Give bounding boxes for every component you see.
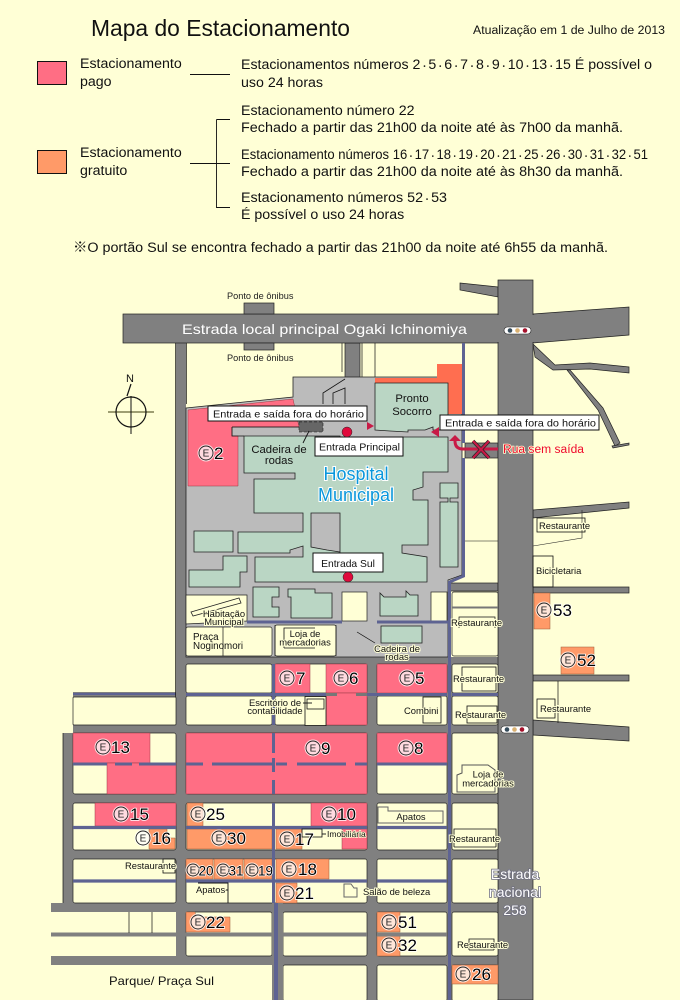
traffic light north bbox=[504, 327, 531, 334]
south building 3 bbox=[380, 591, 418, 616]
east wing bbox=[440, 483, 458, 567]
beauty salon bbox=[344, 884, 431, 897]
callout: main entrance: Entrada Principal bbox=[319, 442, 400, 454]
marker 7: E bbox=[284, 674, 291, 684]
building label: wheelchair bbox=[251, 431, 309, 467]
restaurant 7: Restaurante bbox=[125, 860, 176, 871]
marker 30: 30 bbox=[227, 829, 246, 848]
accounting office bbox=[247, 696, 326, 726]
restaurant 5: Restaurante bbox=[540, 703, 591, 714]
municipal housing: Habitação bbox=[203, 608, 245, 619]
callout: after-hours entrance east bbox=[440, 415, 599, 430]
callout: main entrance bbox=[315, 437, 403, 456]
marker 30: E bbox=[216, 834, 223, 844]
traffic light south bbox=[501, 726, 529, 733]
emergency lot strip bbox=[375, 364, 462, 414]
real estate office: Imobiliária bbox=[327, 829, 366, 839]
restaurant 8: Restaurante bbox=[457, 939, 508, 950]
restaurant 5 bbox=[537, 681, 591, 723]
restaurant east 1: Restaurante bbox=[539, 520, 590, 531]
legend: free parking bbox=[38, 103, 648, 223]
marker 16: E bbox=[140, 834, 147, 844]
entrance markers bbox=[342, 422, 439, 582]
stairs bbox=[299, 422, 323, 432]
marker 30 bbox=[210, 829, 246, 848]
marker 15 bbox=[112, 805, 149, 824]
west lawn bbox=[186, 595, 247, 624]
store block bbox=[275, 625, 336, 656]
legend: free parking: Fechado a partir das 21h00 da noite até às 8h30 da manhã. bbox=[241, 164, 623, 180]
apartments east: Apatos bbox=[396, 811, 426, 822]
accounting office: contabilidade bbox=[247, 705, 303, 716]
marker 51 bbox=[380, 913, 417, 932]
marker 53: 53 bbox=[553, 601, 572, 620]
municipal housing: Municipal bbox=[204, 616, 244, 627]
restaurant 6: Restaurante bbox=[449, 833, 500, 844]
note: south gate: ※O portão Sul se encontra fechado a partir das 21h00 da noite até 6h55 da manhã. bbox=[73, 240, 608, 256]
marker 53 bbox=[536, 601, 572, 620]
wheelchair label south: Cadeira de bbox=[374, 643, 420, 654]
road name: national road 258 bbox=[489, 866, 541, 918]
marker 22 bbox=[190, 913, 225, 932]
blue boundary bbox=[450, 343, 464, 657]
marker 5 bbox=[398, 669, 424, 688]
marker 16 bbox=[134, 829, 171, 848]
marker 18: 18 bbox=[298, 860, 317, 879]
map bbox=[0, 280, 629, 1000]
legend: free parking: Estacionamento números 16・17・18・19・20・21・25・26・30・31・32・51 bbox=[241, 147, 648, 163]
wheelchair label south: rodas bbox=[385, 651, 409, 662]
south building 1 bbox=[253, 587, 279, 617]
store label south: Loja de bbox=[473, 768, 503, 780]
dead end arrow: Rua sem saída bbox=[503, 444, 585, 456]
marker 7: 7 bbox=[296, 669, 305, 688]
road network bbox=[51, 280, 629, 1000]
marker 32: 32 bbox=[398, 936, 417, 955]
restaurant 2: Restaurante bbox=[451, 617, 502, 628]
title: Mapa do Estacionamento bbox=[91, 15, 350, 41]
parking markers bbox=[94, 444, 596, 984]
building label: emergency: Socorro bbox=[392, 406, 432, 418]
marker 15: E bbox=[118, 810, 125, 820]
Noginomori square label: Noginomori bbox=[193, 641, 243, 652]
hospital grounds bbox=[186, 343, 464, 657]
marker 26: 26 bbox=[472, 965, 491, 984]
marker 2: E bbox=[203, 448, 210, 460]
south-west wing bbox=[189, 556, 247, 587]
store label north bbox=[279, 628, 331, 648]
update date: Atualização em 1 de Julho de 2013 bbox=[473, 25, 665, 37]
Noginomori square bbox=[186, 627, 272, 656]
restaurant east 1 bbox=[533, 510, 590, 546]
legend: free parking: Fechado a partir das 21h00 da noite até às 7h00 da manhã. bbox=[241, 120, 623, 136]
marker 32: E bbox=[386, 940, 393, 952]
road name: national road 258: nacional bbox=[489, 884, 541, 900]
marker 52: E bbox=[565, 656, 572, 666]
municipal housing bbox=[191, 598, 245, 627]
marker 2: 2 bbox=[214, 444, 223, 463]
marker 20: 20 bbox=[198, 864, 214, 878]
callout: after-hours entrance west bbox=[208, 406, 367, 421]
restaurant 6 bbox=[449, 829, 500, 847]
marker 6 bbox=[332, 669, 358, 688]
building label: wheelchair: rodas bbox=[265, 455, 293, 467]
marker 25: 25 bbox=[206, 805, 225, 824]
marker 19: 19 bbox=[258, 864, 273, 878]
dead end arrow bbox=[449, 435, 585, 458]
park and lower-left cover bbox=[0, 965, 272, 1000]
marker 51: E bbox=[386, 918, 393, 928]
wheelchair label south bbox=[357, 632, 420, 662]
marker 52 bbox=[560, 651, 596, 670]
marker 31: 31 bbox=[228, 864, 244, 878]
marker 6: 6 bbox=[349, 669, 358, 688]
marker 5: 5 bbox=[415, 669, 424, 688]
marker 18 bbox=[280, 860, 317, 879]
Noginomori square label: Praça bbox=[193, 632, 219, 643]
marker 5: E bbox=[404, 674, 411, 684]
bicycle shop: Bicicletaria bbox=[536, 565, 582, 576]
apartments south bbox=[196, 883, 228, 903]
marker 21: 21 bbox=[295, 884, 314, 903]
store label north: mercadorias bbox=[279, 636, 331, 648]
marker 26 bbox=[454, 965, 491, 984]
legend: free parking: É possível o uso 24 horas bbox=[241, 206, 404, 223]
marker 6: E bbox=[338, 674, 345, 684]
marker 51: 51 bbox=[398, 913, 417, 932]
callout: south entrance bbox=[313, 553, 383, 572]
legend: free parking: Estacionamento número 22 bbox=[241, 103, 415, 119]
real estate office bbox=[302, 829, 366, 839]
marker 7 bbox=[278, 669, 305, 688]
marker 18: E bbox=[286, 864, 293, 876]
legend: paid parking: Estacionamentos números 2・5・6・7・8・9・10・13・15 É possível o bbox=[241, 56, 652, 73]
marker 53: E bbox=[541, 606, 548, 616]
Noginomori square label bbox=[193, 632, 243, 652]
building label: emergency: Pronto bbox=[395, 393, 429, 405]
marker 8: E bbox=[403, 744, 410, 754]
marker 31: E bbox=[220, 866, 227, 876]
legend: free parking: Estacionamento bbox=[80, 145, 182, 161]
road name: national road 258: Estrada bbox=[491, 866, 539, 882]
park label: Parque/ Praça Sul bbox=[109, 974, 214, 988]
marker 13 bbox=[94, 738, 130, 757]
legend: paid parking: uso 24 horas bbox=[241, 75, 323, 91]
marker 10: E bbox=[326, 810, 333, 820]
store label south: mercadorias bbox=[462, 778, 514, 788]
road name: national road 258: 258 bbox=[503, 902, 527, 918]
legend: free parking: Estacionamento números 52・53 bbox=[241, 190, 447, 206]
marker 8: 8 bbox=[414, 739, 423, 758]
main hospital building bbox=[238, 436, 448, 582]
building label: wheelchair: Cadeira de bbox=[251, 444, 307, 456]
building label: emergency bbox=[392, 393, 432, 418]
marker 17: 17 bbox=[295, 830, 314, 849]
restaurant 3 bbox=[453, 667, 504, 691]
bus stops: Ponto de ônibus bbox=[227, 353, 294, 363]
marker 31 bbox=[216, 862, 244, 878]
marker 26: E bbox=[460, 970, 467, 980]
bus stops bbox=[227, 291, 294, 363]
callout: after-hours entrance east: Entrada e saída fora do horário bbox=[445, 418, 596, 430]
marker 10: 10 bbox=[337, 805, 356, 824]
marker 13: E bbox=[100, 742, 107, 754]
callout: after-hours entrance west: Entrada e saída fora do horário bbox=[213, 410, 364, 420]
hospital name bbox=[318, 464, 394, 505]
south service building bbox=[381, 626, 422, 643]
legend: paid parking: pago bbox=[80, 74, 112, 90]
apartments south: Apatos bbox=[196, 884, 225, 895]
store label north: Loja de bbox=[290, 628, 320, 639]
marker 32 bbox=[380, 936, 417, 955]
free parking lots bbox=[149, 593, 594, 984]
marker 17: E bbox=[284, 834, 291, 846]
marker 52: 52 bbox=[577, 651, 596, 670]
south building 2 bbox=[288, 589, 332, 618]
marker 9: 9 bbox=[321, 739, 330, 758]
cream block east bbox=[431, 592, 447, 621]
marker 25: E bbox=[195, 810, 202, 820]
legend: paid parking: Estacionamento bbox=[80, 56, 182, 72]
central courtyard block bbox=[311, 513, 340, 552]
marker 21 bbox=[278, 884, 314, 903]
marker 15: 15 bbox=[130, 805, 149, 824]
convenience store: Combini bbox=[404, 705, 438, 716]
accounting office: Escritório de bbox=[249, 697, 301, 708]
paid parking lots bbox=[73, 664, 447, 849]
marker 16: 16 bbox=[152, 829, 171, 848]
service road band bbox=[247, 620, 448, 624]
marker 20 bbox=[186, 862, 214, 878]
marker 20: E bbox=[190, 866, 197, 876]
cream block south bbox=[342, 592, 367, 621]
apartments east bbox=[378, 807, 443, 823]
marker 21: E bbox=[284, 888, 291, 900]
restaurant 3: Restaurante bbox=[453, 673, 504, 684]
marker 8 bbox=[398, 739, 423, 758]
marker 2 bbox=[198, 444, 223, 463]
parking lot 2 area bbox=[188, 399, 299, 486]
emergency building bbox=[375, 383, 448, 432]
marker 17 bbox=[278, 830, 314, 849]
hospital name: Municipal bbox=[318, 485, 394, 505]
marker 22: E bbox=[195, 918, 202, 928]
callout: south entrance: Entrada Sul bbox=[321, 559, 375, 570]
legend: free parking: gratuito bbox=[80, 163, 127, 179]
marker 25 bbox=[190, 805, 225, 824]
bicycle shop bbox=[533, 556, 582, 587]
city blocks bbox=[51, 592, 498, 1000]
restaurant 4 bbox=[455, 706, 506, 723]
compass: N bbox=[126, 373, 134, 385]
convenience store bbox=[404, 697, 441, 723]
internal driveways bbox=[232, 379, 345, 436]
marker 9 bbox=[304, 739, 330, 758]
legend: paid parking bbox=[38, 56, 652, 91]
restaurant 4: Restaurante bbox=[455, 709, 506, 720]
marker 13: 13 bbox=[111, 738, 130, 757]
compass bbox=[108, 373, 154, 434]
marker 9: E bbox=[310, 744, 317, 754]
marker 19: E bbox=[249, 866, 256, 876]
road name: main prefectural road: Estrada local principal Ogaki Ichinomiya bbox=[182, 321, 467, 337]
hospital name: Hospital bbox=[323, 464, 389, 484]
marker 10 bbox=[320, 805, 356, 824]
marker 22: 22 bbox=[206, 913, 225, 932]
marker 19 bbox=[244, 862, 273, 878]
store label south bbox=[457, 765, 514, 792]
beauty salon: Salão de beleza bbox=[363, 886, 431, 897]
bus stops: Ponto de ônibus bbox=[227, 291, 294, 301]
side streets bbox=[51, 625, 498, 1000]
west wing bbox=[194, 531, 233, 552]
